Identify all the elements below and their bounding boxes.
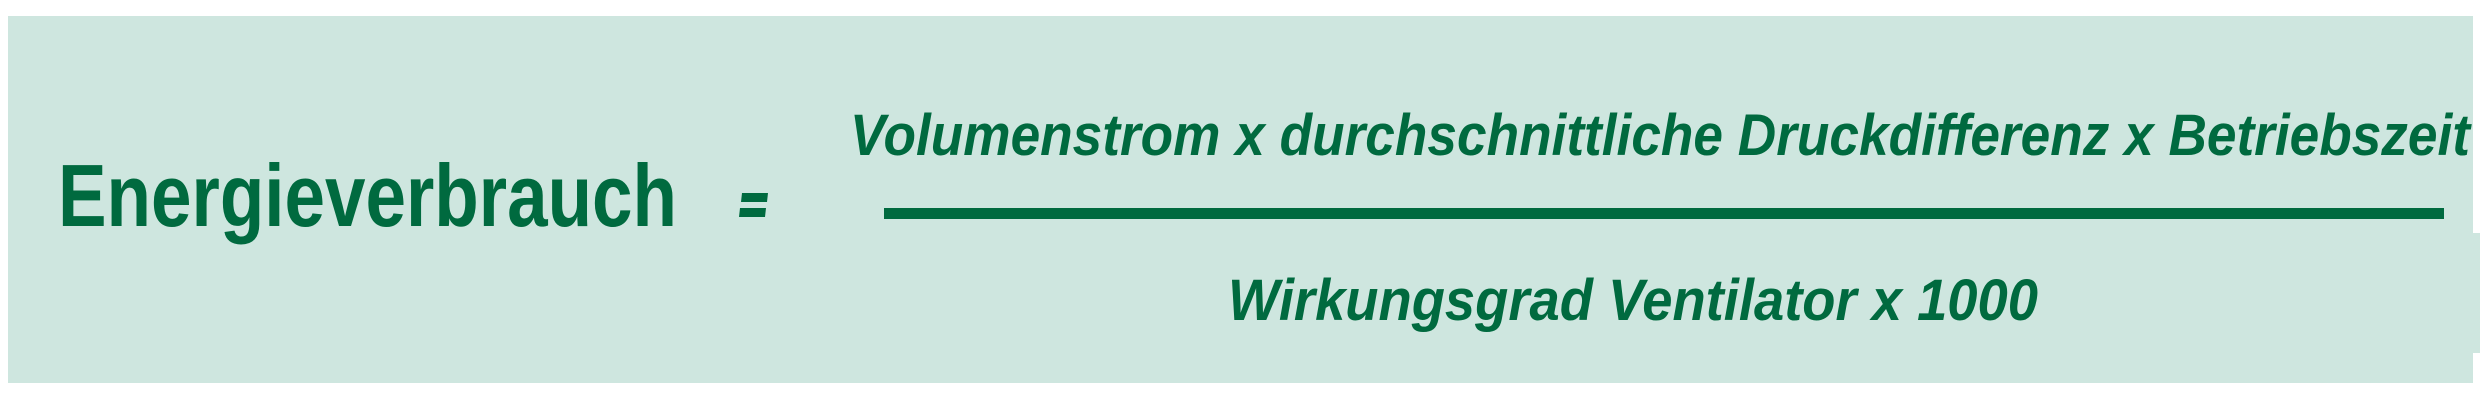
title: Energieverbrauch: Energieverbrauch	[58, 146, 677, 245]
fraction line	[884, 208, 2444, 219]
denominator text: Wirkungsgrad Ventilator x 1000	[1228, 268, 2038, 333]
equals sign	[739, 193, 768, 217]
